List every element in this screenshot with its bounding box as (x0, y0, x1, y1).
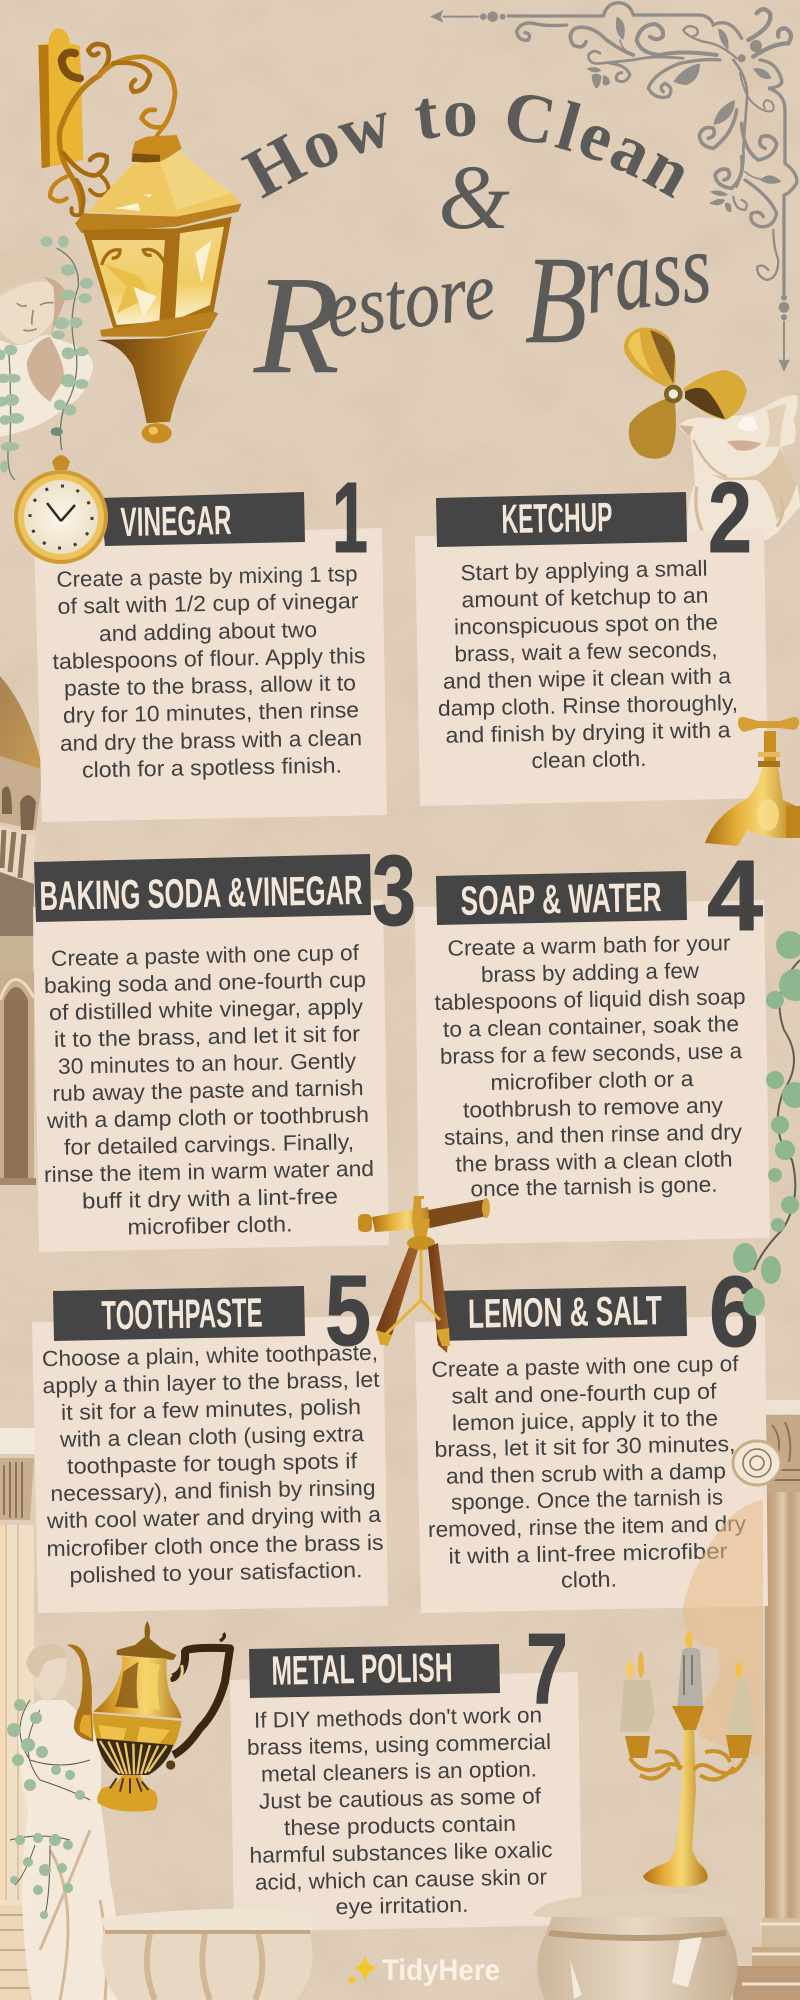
text block: lemon and salt steps: salt and one-fourth cup of (451, 1378, 718, 1409)
text block: baking soda steps: Create a paste with one cup of (51, 940, 360, 971)
heading: ketchup (436, 492, 687, 547)
text block: toothpaste steps (42, 1340, 384, 1588)
panel: 6 lemon and salt (415, 1256, 768, 1613)
text block: ketchup steps (438, 556, 738, 773)
text block: soap and water steps: to a clean container, soak the (443, 1011, 739, 1042)
text block: toothpaste steps: it sit for a few minutes, polish (61, 1394, 361, 1425)
text block: soap and water steps: brass by adding a few (481, 958, 699, 987)
text block: vinegar steps: and adding about two (99, 617, 317, 646)
heading: vinegar: VINEGAR (120, 497, 232, 545)
panel: 1 vinegar (34, 462, 387, 822)
text block: metal polish steps: harmful substances like oxalic (249, 1837, 553, 1868)
text block: vinegar steps: dry for 10 minutes, then rinse (63, 697, 359, 728)
number 6: 6 (709, 1256, 759, 1368)
illustration: brass water tap (705, 717, 800, 846)
text block: metal polish steps: metal cleaners is an option. (261, 1756, 537, 1787)
text block: ketchup steps: brass, wait a few seconds, (454, 636, 718, 667)
text block: toothpaste steps: microfiber cloth once the brass is (46, 1530, 384, 1561)
text block: metal polish steps: If DIY methods don't work on (254, 1702, 542, 1733)
logo: TidyHere: TidyHere (382, 1954, 500, 1987)
text block: metal polish steps: acid, which can cause skin or (255, 1864, 547, 1895)
text block: baking soda steps: baking soda and one-fourth cup (44, 967, 366, 998)
heading: soap and water (436, 871, 687, 925)
text block: soap and water steps: once the tarnish is gone. (470, 1172, 718, 1201)
text block: vinegar steps (52, 561, 366, 782)
title line: Restore Brass: B (525, 232, 587, 370)
text block: metal polish steps: these products contain (284, 1811, 516, 1840)
text block: baking soda steps: 30 minutes to an hour. Gently (58, 1048, 356, 1079)
heading: lemon and salt: LEMON & SALT (468, 1287, 662, 1337)
text block: vinegar steps: and dry the brass with a clean (60, 725, 362, 756)
panel: 3 baking soda and vinegar (33, 835, 416, 1252)
text block: ketchup steps: and finish by drying it with a (445, 717, 732, 748)
title line: Restore Brass: estore (321, 244, 500, 355)
text block: toothpaste steps: apply a thin layer to the brass, let (42, 1367, 380, 1398)
text block: metal polish steps: eye irritation. (335, 1892, 469, 1919)
text block: baking soda steps: for detailed carvings. Finally, (64, 1129, 354, 1160)
illustration: brass teapot (67, 1621, 230, 1811)
heading: metal polish: METAL POLISH (271, 1644, 453, 1694)
heading: soap and water: SOAP & WATER (460, 874, 662, 924)
text block: toothpaste steps: Choose a plain, white toothpaste, (42, 1340, 378, 1371)
illustration: right-edge climbing vine (733, 931, 800, 1316)
illustration: peach watercolour blot (683, 1500, 763, 1756)
title line: Restore Brass: R (253, 248, 340, 403)
text block: ketchup steps: damp cloth. Rinse thoroughly, (438, 690, 738, 721)
text block: soap and water steps (434, 930, 746, 1201)
text block: lemon and salt steps: Create a paste with one cup of (431, 1351, 740, 1382)
text block: ketchup steps: inconspicuous spot on the (454, 609, 718, 640)
illustration: gold pocket watch (14, 455, 108, 564)
illustration: green vine on statue (0, 236, 93, 480)
number 4: 4 (707, 840, 763, 952)
illustration: ivy on statue (7, 1699, 90, 1919)
text block: lemon and salt steps: and then scrub with a damp (446, 1458, 726, 1489)
number 1: 1 (332, 462, 368, 574)
heading: ketchup: KETCHUP (501, 494, 613, 542)
text block: vinegar steps: paste to the brass, allow it to (64, 670, 356, 701)
text block: soap and water steps: brass for a few seconds, use a (440, 1038, 743, 1069)
panel: 7 metal polish (230, 1613, 582, 1932)
illustration: right classical column (733, 1400, 800, 2000)
text block: vinegar steps: Create a paste by mixing 1 tsp (56, 561, 358, 592)
illustration: brass propeller (624, 328, 747, 459)
panel: 5 toothpaste (32, 1255, 388, 1613)
text block: soap and water steps: the brass with a clean cloth (455, 1146, 733, 1177)
number 2: 2 (708, 462, 752, 574)
illustration: brass telescope on tripod (358, 1196, 490, 1353)
illustration: domed tower on left edge (0, 676, 43, 1185)
title ampersand: & (438, 146, 510, 248)
illustration: right stone urn (533, 1893, 739, 2000)
heading: toothpaste: TOOTHPASTE (101, 1289, 263, 1339)
text block: baking soda steps: of distilled white vinegar, apply (49, 994, 363, 1025)
panel: 4 soap and water (415, 840, 770, 1245)
text block: lemon and salt steps: lemon juice, apply it to the (452, 1405, 718, 1436)
text block: lemon and salt steps: cloth. (561, 1566, 617, 1593)
illustration: marble statue head with vines (0, 246, 93, 437)
text block: metal polish steps (247, 1702, 553, 1919)
text block: soap and water steps: tablespoons of liquid dish soap (434, 984, 746, 1015)
panel: 2 ketchup (415, 462, 768, 806)
heading: metal polish (249, 1644, 500, 1698)
text block: toothpaste steps: toothpaste for tough spots if (67, 1448, 358, 1479)
text block: baking soda steps: rinse the item in warm water and (44, 1156, 374, 1187)
text block: ketchup steps: and then wipe it clean with a (443, 663, 732, 694)
text block: metal polish steps: brass items, using commercial (247, 1729, 551, 1760)
title line: Restore Brass (253, 211, 716, 403)
text block: baking soda steps: with a damp cloth or toothbrush (46, 1102, 369, 1133)
text block: baking soda steps: it to the brass, and let it sit for (54, 1021, 360, 1052)
text block: toothpaste steps: polished to your satisfaction. (69, 1557, 363, 1588)
text block: soap and water steps: toothbrush to remove any (463, 1093, 723, 1122)
text block: vinegar steps: tablespoons of flour. Apply this (52, 643, 366, 674)
illustration: column volute (733, 1441, 781, 1485)
text block: lemon and salt steps (428, 1351, 746, 1593)
text block: soap and water steps: stains, and then rinse and dry (444, 1119, 742, 1150)
text block: toothpaste steps: with cool water and drying with a (46, 1502, 382, 1533)
title: How to Clean & Restore Brass (240, 95, 716, 403)
text block: ketchup steps: clean cloth. (531, 746, 647, 773)
number 5: 5 (325, 1255, 371, 1367)
text block: vinegar steps: of salt with 1/2 cup of vinegar (57, 588, 359, 619)
text block: lemon and salt steps: it with a lint-free microfiber (448, 1538, 728, 1569)
number 7: 7 (526, 1613, 568, 1725)
text block: metal polish steps: Just be cautious as some of (259, 1783, 542, 1814)
text block: baking soda steps (44, 940, 374, 1240)
text block: baking soda steps: buff it dry with a lint-free (82, 1184, 338, 1213)
text block: baking soda steps: rub away the paste and tarnish (52, 1075, 364, 1106)
text block: lemon and salt steps: sponge. Once the tarnish is (451, 1484, 723, 1515)
illustration: marble bust fragment (678, 395, 800, 540)
heading: baking soda and vinegar: BAKING SODA &VINEGAR (39, 867, 363, 919)
text block: toothpaste steps: with a clean cloth (using extra (59, 1421, 365, 1452)
text block: lemon and salt steps: removed, rinse the item and dry (428, 1511, 746, 1542)
heading: lemon and salt (436, 1286, 687, 1341)
illustration: white marble statue with vine (18, 1644, 120, 2000)
title line: Restore Brass: rass (579, 211, 716, 335)
text block: ketchup steps: Start by applying a small (460, 556, 708, 585)
illustration: left classical column (0, 1428, 36, 2000)
text block: lemon and salt steps: brass, let it sit for 30 minutes, (434, 1431, 736, 1462)
illustration: brass candelabra with candles (620, 1632, 757, 1887)
ornament: corner flourish border (430, 3, 797, 372)
illustration: left stone urn (100, 1909, 314, 2000)
title line: How to Clean: How to Clean (240, 95, 684, 199)
text block: vinegar steps: cloth for a spotless finish. (82, 753, 342, 782)
heading: baking soda and vinegar (34, 854, 371, 922)
text block: ketchup steps: amount of ketchup to an (461, 583, 709, 612)
text block: soap and water steps: microfiber cloth or a (490, 1066, 695, 1095)
number 3: 3 (372, 835, 416, 947)
text block: baking soda steps: microfiber cloth. (127, 1211, 293, 1240)
text block: soap and water steps: Create a warm bath for your (447, 930, 731, 961)
heading: toothpaste (53, 1286, 305, 1341)
text block: toothpaste steps: necessary), and finish by rinsing (50, 1475, 376, 1506)
illustration: brass wall lantern (38, 28, 242, 443)
